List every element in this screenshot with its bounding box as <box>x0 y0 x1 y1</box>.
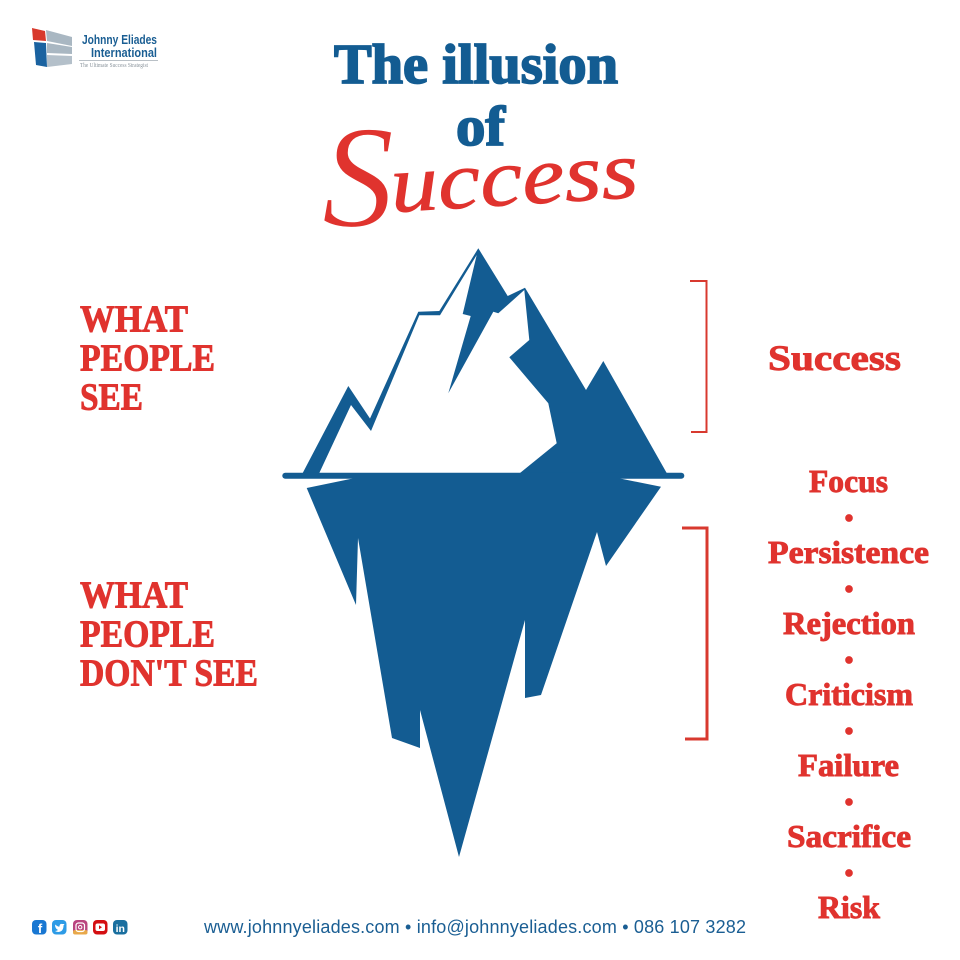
iceberg above water silhouette <box>303 248 667 473</box>
list: hidden factors: Persistence <box>768 534 929 570</box>
label: what people see <box>80 298 215 418</box>
list: hidden factors: Sacrifice <box>787 818 911 854</box>
list: hidden factors: Criticism <box>785 676 913 712</box>
label: what people don't see: WHAT <box>80 574 188 616</box>
list: hidden factors: Rejection <box>783 605 915 641</box>
label: what people don't see: PEOPLE <box>80 614 215 656</box>
bracket: above water <box>690 281 706 432</box>
logo: Johnny Eliades International: The Ultimate Success Strategist <box>80 63 148 69</box>
list: hidden factors: Risk <box>818 889 880 925</box>
list: hidden factors: Focus <box>809 463 888 499</box>
iceberg lit face <box>319 255 557 473</box>
iceberg <box>282 248 684 857</box>
icon: linkedin: in <box>116 923 125 935</box>
footer contact line: www.johnnyeliades.com • info@johnnyeliades.com • 086 107 3282 <box>203 917 746 937</box>
social icons <box>32 920 128 936</box>
icon: instagram <box>73 920 88 934</box>
label: what people see: WHAT <box>80 298 188 340</box>
bracket: below water <box>682 528 707 739</box>
icon: youtube <box>93 920 108 934</box>
list: hidden factors: Failure <box>798 747 899 783</box>
list: hidden factors <box>768 463 929 925</box>
icon: twitter <box>52 920 66 934</box>
label: what people see: SEE <box>80 376 143 418</box>
label: success: Success <box>768 338 901 378</box>
water line <box>282 473 684 479</box>
label: what people see: PEOPLE <box>80 338 215 380</box>
logo: Johnny Eliades International: International <box>91 46 157 60</box>
title: uccess <box>388 124 641 230</box>
title <box>322 34 641 258</box>
logo: Johnny Eliades International: Johnny Eliades <box>82 33 157 47</box>
logo: Johnny Eliades International <box>32 28 158 69</box>
icon: facebook: f <box>38 921 43 936</box>
label: what people don't see <box>80 574 258 694</box>
title: The illusion <box>334 34 618 96</box>
label: what people don't see: DON'T SEE <box>80 652 258 694</box>
title: of <box>456 96 506 158</box>
title: S <box>322 96 394 258</box>
iceberg below water <box>307 478 661 857</box>
